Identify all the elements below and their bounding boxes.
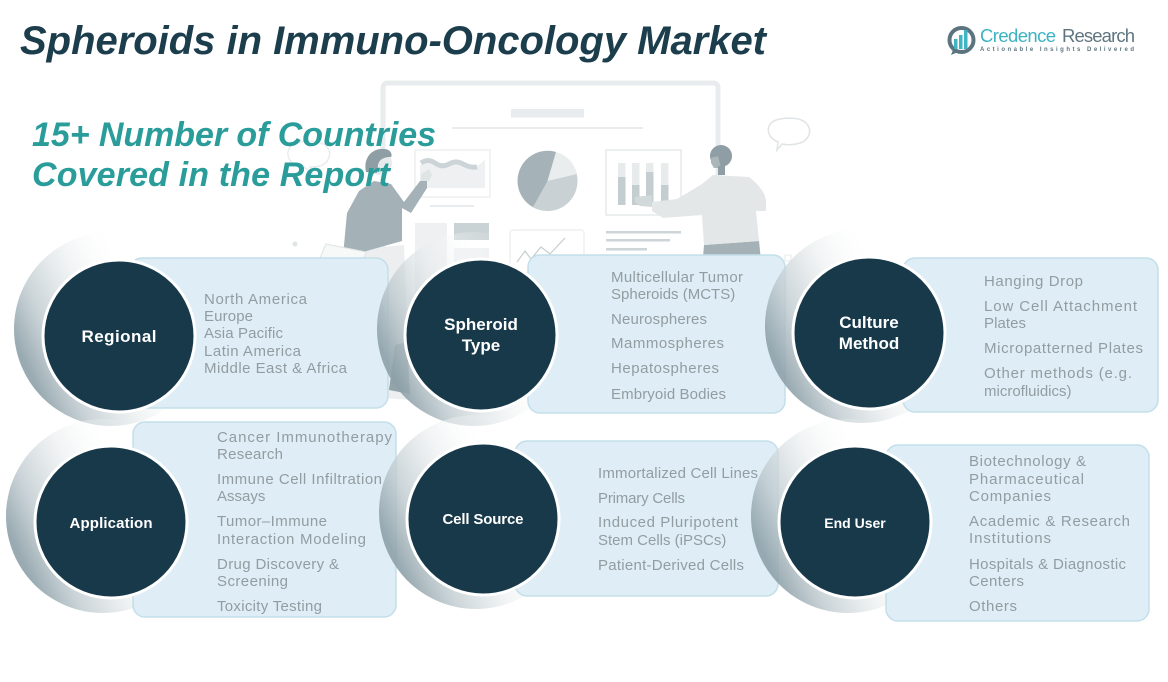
label: Spheroid Type: Type (462, 336, 500, 355)
list: end users: Biotechnology & (969, 453, 1086, 470)
list: cell sources: Induced Pluripotent (598, 514, 739, 531)
bar chart (606, 150, 681, 215)
list: applications: Assays (217, 488, 265, 505)
list: end users: Others (969, 598, 1017, 615)
list: cell sources: Immortalized Cell Lines (598, 465, 758, 482)
list: applications: Screening (217, 573, 288, 590)
list: applications: Drug Discovery & (217, 556, 339, 573)
logo wordmark (980, 25, 1135, 46)
list: applications: Immune Cell Infiltration (217, 471, 382, 488)
list: spheroid types: Hepatospheres (611, 360, 719, 377)
speech bubble right (768, 118, 810, 150)
label: Culture Method: Method (839, 334, 899, 353)
label: End User: End User (824, 515, 886, 531)
list: culture methods: microfluidics) (984, 383, 1072, 400)
list: applications: Research (217, 446, 283, 463)
panel: Culture Method (765, 229, 1158, 423)
list: spheroid types: Neurospheres (611, 311, 707, 328)
list: spheroid types: Embryoid Bodies (611, 386, 726, 403)
logo wordmark: Research (1062, 25, 1135, 46)
list: culture methods (984, 273, 1143, 400)
panel: Application (6, 419, 396, 617)
left block chart (415, 205, 489, 293)
line chart (510, 230, 584, 276)
list: regions: Middle East & Africa (204, 360, 348, 377)
panel: Cell Source (379, 415, 778, 609)
list: applications: Cancer Immunotherapy (217, 429, 392, 446)
list: regions: Asia Pacific (204, 325, 284, 342)
list: end users: Hospitals & Diagnostic (969, 556, 1126, 573)
list: spheroid types: Multicellular Tumor (611, 269, 743, 286)
list: applications (217, 429, 392, 615)
person: woman presenter (292, 149, 432, 400)
list: cell sources: Primary Cells (598, 490, 685, 507)
list: applications: Toxicity Testing (217, 598, 322, 615)
list: culture methods: Other methods (e.g. (984, 365, 1132, 382)
list: culture methods: Plates (984, 315, 1026, 332)
board frame (383, 83, 718, 392)
label: Cell Source: Cell Source (442, 511, 524, 528)
list: culture methods: Micropatterned Plates (984, 340, 1143, 357)
panel: Regional (14, 232, 388, 426)
list: cell sources (598, 465, 758, 574)
list: regions: North America (204, 291, 308, 308)
list: end users: Centers (969, 573, 1024, 590)
logo: Credence Research (950, 25, 1135, 55)
list: spheroid types: Mammospheres (611, 335, 724, 352)
subtitle: Covered in the Report (32, 156, 392, 194)
list: culture methods: Hanging Drop (984, 273, 1083, 290)
list: end users: Companies (969, 488, 1051, 505)
speech bubble left (288, 141, 330, 173)
icon: logo chart badge (950, 28, 974, 55)
label: Culture Method: Culture (839, 313, 899, 332)
label: Regional: Regional (82, 327, 156, 346)
list: applications: Interaction Modeling (217, 531, 366, 548)
area chart (415, 150, 490, 197)
illustration: presentation board with two presenters (288, 83, 810, 400)
subtitle (32, 116, 436, 194)
list: regions: Latin America (204, 343, 302, 360)
person: man presenter (635, 145, 791, 270)
logo tagline: Actionable Insights Delivered (980, 47, 1134, 53)
label: Spheroid Type: Spheroid (444, 315, 518, 334)
board heading bars (452, 109, 643, 129)
list: culture methods: Low Cell Attachment (984, 298, 1138, 315)
list: cell sources: Patient-Derived Cells (598, 557, 744, 574)
list: end users: Academic & Research (969, 513, 1130, 530)
list: spheroid types: Spheroids (MCTS) (611, 286, 735, 303)
list: regions: Europe (204, 308, 253, 325)
list: applications: Tumor–Immune (217, 513, 327, 530)
label: Application: Application (70, 515, 152, 532)
list: cell sources: Stem Cells (iPSCs) (598, 532, 726, 549)
list: end users: Institutions (969, 530, 1051, 547)
pie chart (518, 151, 578, 211)
subtitle: 15+ Number of Countries (32, 116, 436, 154)
title: Spheroids in Immuno-Oncology Market (20, 19, 768, 63)
panel: Spheroid Type (377, 232, 785, 426)
list: regions (204, 291, 348, 377)
list: end users: Pharmaceutical (969, 471, 1084, 488)
text lines (606, 231, 681, 266)
list: spheroid types (611, 269, 743, 403)
panel: End User (751, 419, 1149, 621)
logo wordmark: Credence (980, 25, 1056, 46)
list: end users (969, 453, 1130, 615)
